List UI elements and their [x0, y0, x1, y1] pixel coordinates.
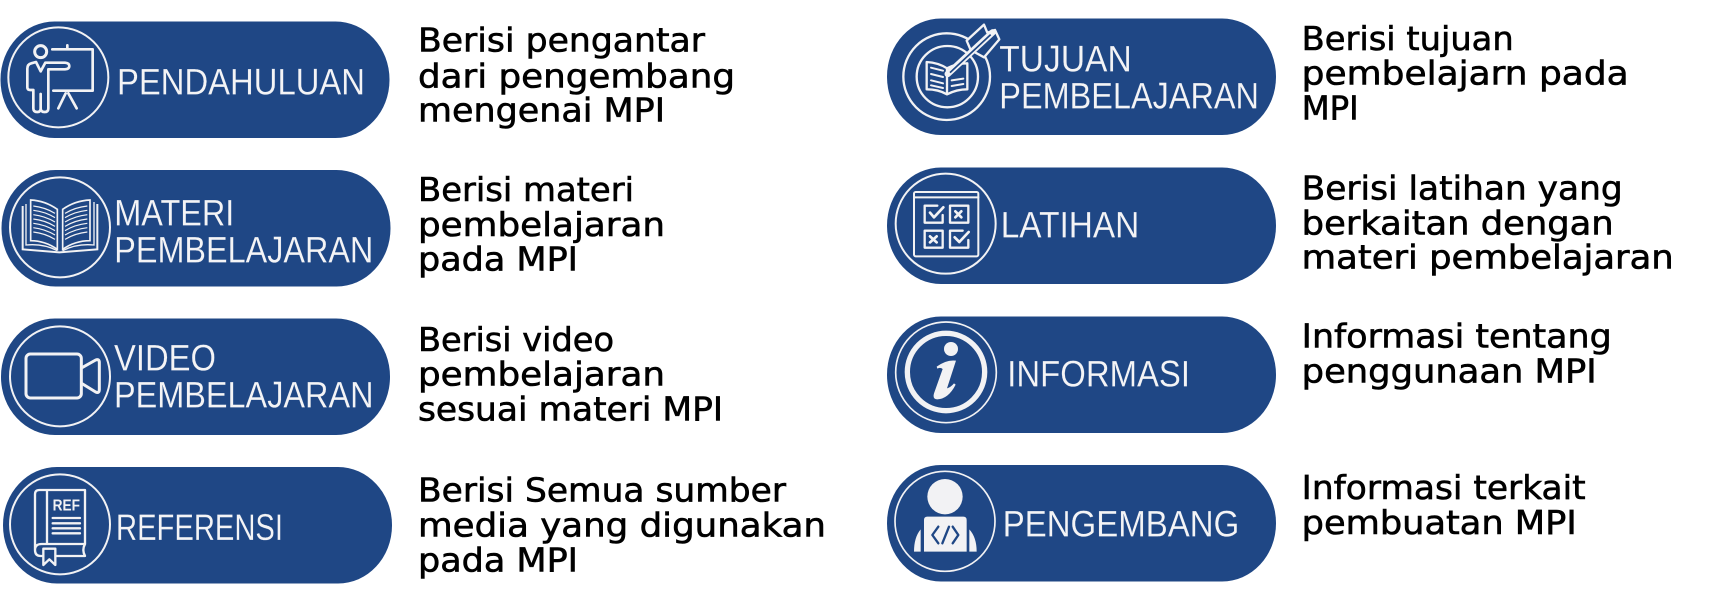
- pill: tujuan: [887, 18, 1276, 135]
- description: pendahuluan: [418, 21, 735, 130]
- label: video: VIDEO: [114, 338, 216, 379]
- description: informasi: penggunaan MPI: [1302, 352, 1597, 391]
- description: pendahuluan: dari pengembang: [418, 56, 735, 95]
- label: latihan: LATIHAN: [1001, 205, 1139, 246]
- label: materi: PEMBELAJARAN: [114, 229, 373, 270]
- label: materi: MATERI: [114, 193, 234, 234]
- description: video: sesuai materi MPI: [418, 390, 723, 429]
- description: pengembang: pembuatan MPI: [1302, 503, 1577, 542]
- description: pengembang: Informasi terkait: [1302, 468, 1586, 507]
- icon: checklist window: [896, 174, 996, 274]
- pill: latihan: [887, 168, 1276, 284]
- description: materi: Berisi materi: [418, 170, 634, 209]
- pill: video: [1, 318, 390, 435]
- description: video: pembelajaran: [418, 355, 665, 394]
- panel: latihan: [887, 168, 1674, 284]
- label: tujuan: TUJUAN: [999, 39, 1132, 80]
- description: materi: pada MPI: [418, 240, 578, 279]
- description: video: Berisi video: [418, 320, 614, 359]
- description: pendahuluan: Berisi pengantar: [418, 21, 705, 60]
- label: referensi: REFERENSI: [116, 507, 283, 548]
- label: pendahuluan: PENDAHULUAN: [117, 61, 365, 102]
- label: pengembang: PENGEMBANG: [1003, 504, 1239, 545]
- description: materi: pembelajaran: [418, 205, 665, 244]
- icon: target with book and arrow: [903, 25, 999, 120]
- pill: pendahuluan: [0, 22, 390, 138]
- panel: pendahuluan: [0, 21, 735, 138]
- pill: materi: [2, 170, 390, 286]
- label: tujuan: [999, 39, 1259, 117]
- description: referensi: Berisi Semua sumber: [418, 471, 786, 510]
- description: pengembang: [1302, 468, 1586, 542]
- panel: tujuan pembelajaran: [887, 18, 1629, 135]
- description: tujuan: Berisi tujuan: [1302, 19, 1514, 58]
- icon: reference book: [10, 474, 110, 574]
- pill: informasi: [887, 316, 1276, 433]
- label: materi: [114, 193, 373, 270]
- description: video: [418, 320, 723, 429]
- label: video: PEMBELAJARAN: [114, 375, 374, 416]
- pill: pengembang: [887, 465, 1276, 582]
- description: referensi: media yang digunakan: [418, 506, 826, 545]
- panel: informasi: [887, 316, 1612, 433]
- description: referensi: pada MPI: [418, 541, 578, 580]
- label: tujuan: PEMBELAJARAN: [999, 76, 1259, 117]
- description: latihan: [1302, 168, 1674, 277]
- icon: reference book: REF: [53, 498, 80, 515]
- description: referensi: [418, 471, 826, 580]
- icon: developer: [895, 471, 995, 571]
- description: informasi: [1302, 317, 1612, 391]
- panel: materi pembelajaran: [2, 170, 665, 286]
- description: tujuan: MPI: [1302, 88, 1359, 127]
- label: video: [114, 338, 374, 416]
- icon: information: [896, 322, 996, 423]
- icon: presenter at board: [8, 27, 108, 127]
- description: tujuan: [1302, 19, 1629, 127]
- pill: referensi: [3, 467, 392, 584]
- panel: pengembang: [887, 465, 1586, 582]
- description: tujuan: pembelajarn pada: [1302, 53, 1629, 92]
- description: informasi: Informasi tentang: [1302, 317, 1612, 356]
- icon: open book: [10, 177, 110, 277]
- description: materi: [418, 170, 665, 279]
- description: latihan: materi pembelajaran: [1302, 238, 1674, 277]
- label: informasi: INFORMASI: [1007, 354, 1190, 395]
- panel: referensi: [3, 467, 826, 584]
- panel: video pembelajaran: [1, 318, 723, 435]
- icon: video camera: [10, 326, 110, 426]
- description: pendahuluan: mengenai MPI: [418, 91, 665, 130]
- description: latihan: Berisi latihan yang: [1302, 168, 1623, 207]
- description: latihan: berkaitan dengan: [1302, 203, 1614, 242]
